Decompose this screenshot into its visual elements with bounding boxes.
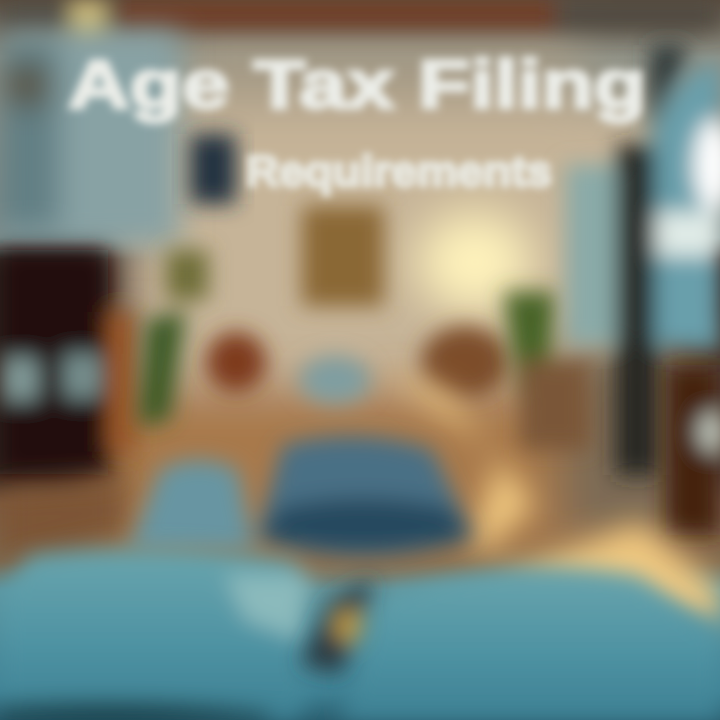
wall picture — [302, 206, 384, 306]
window — [566, 45, 720, 475]
floor highlight — [0, 372, 720, 625]
title — [68, 46, 646, 196]
main heading: Age Tax Filing — [68, 46, 646, 123]
dark wall square — [190, 134, 236, 204]
bookcase — [0, 250, 136, 474]
plant right — [504, 292, 590, 450]
glowing lamp — [417, 212, 533, 312]
pen on book — [300, 578, 374, 674]
right cabinet — [666, 365, 720, 535]
chair and pouf — [206, 326, 509, 404]
ceiling — [0, 0, 720, 48]
subtitle: Requirements — [246, 147, 552, 196]
plant left — [138, 250, 208, 426]
open book — [0, 548, 720, 720]
left wall panel — [0, 30, 180, 245]
blue cushions — [128, 436, 474, 557]
back wall — [100, 35, 720, 560]
